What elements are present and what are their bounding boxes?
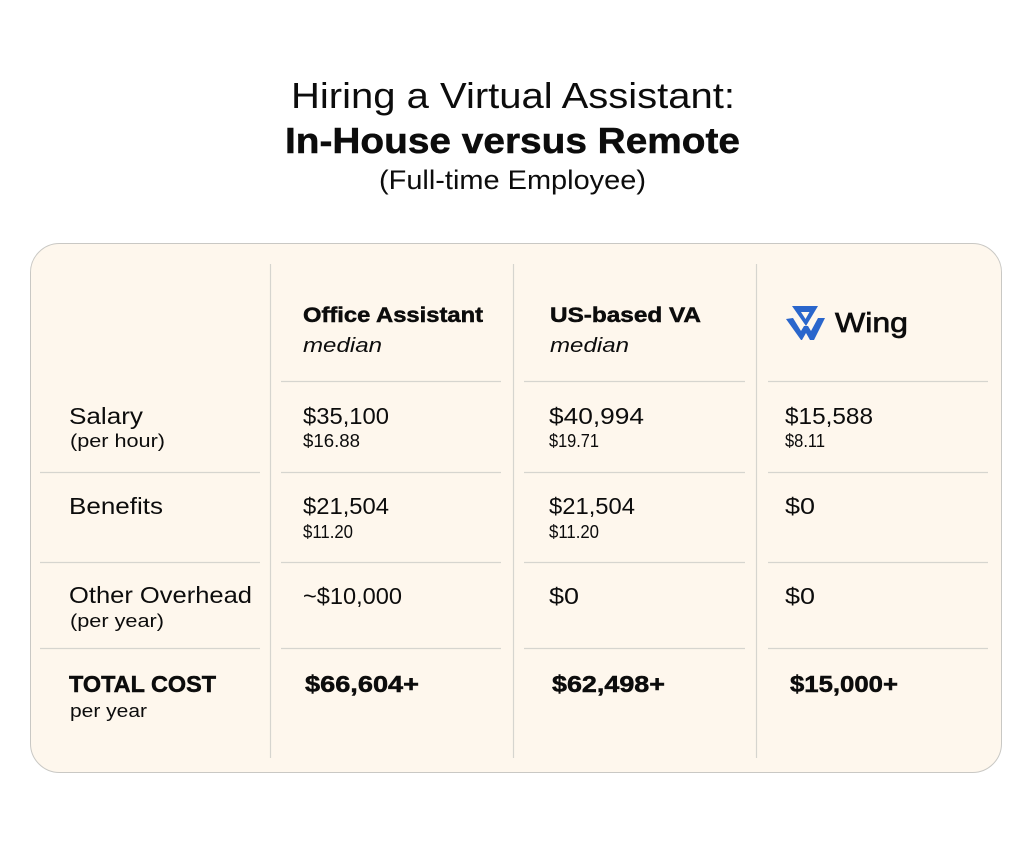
row: Benefits — [69, 493, 815, 542]
row: Salary: $19.71 — [549, 430, 599, 451]
row: Other Overhead: ~$10,000 — [303, 583, 402, 609]
row: Total cost: TOTAL COST — [69, 671, 216, 697]
row: Other Overhead: (per year) — [70, 610, 164, 631]
title: In-House versus Remote — [285, 120, 740, 161]
panel: comparison table — [30, 244, 1002, 772]
icon: Wing logo mark — [786, 306, 825, 340]
column header: US-based VA — [550, 303, 701, 357]
row: Salary: $35,100 — [303, 403, 389, 429]
title: (Full-time Employee) — [379, 165, 646, 195]
row: Benefits: $11.20 — [303, 521, 353, 542]
row: Total cost — [69, 671, 898, 721]
title: Hiring a Virtual Assistant: — [291, 75, 735, 116]
row: Benefits: $21,504 — [303, 493, 389, 519]
column header: US-based VA: median — [550, 334, 629, 357]
row: Benefits: Benefits — [69, 493, 163, 519]
row: Benefits: $0 — [785, 493, 815, 519]
row: Salary: $16.88 — [303, 430, 360, 451]
row: Salary: (per hour) — [70, 430, 165, 451]
column header: Wing logo — [786, 306, 908, 340]
row: Benefits: $11.20 — [549, 521, 599, 542]
row: Benefits: $21,504 — [549, 493, 635, 519]
column header: Office Assistant: Office Assistant — [303, 303, 483, 327]
row: Other Overhead: $0 — [549, 583, 579, 609]
column header: Wing logo: Wing — [835, 307, 908, 338]
column header: Office Assistant — [303, 303, 483, 357]
title — [285, 75, 740, 195]
row: Salary: $15,588 — [785, 403, 873, 429]
column header: Office Assistant: median — [303, 334, 382, 357]
row: Total cost: $66,604+ — [305, 671, 419, 697]
row: Other Overhead — [69, 582, 815, 631]
row: Salary: Salary — [69, 403, 144, 429]
row: Total cost: $62,498+ — [552, 671, 665, 697]
row: Other Overhead: $0 — [785, 583, 815, 609]
row: Salary: $8.11 — [785, 430, 825, 451]
row: Total cost: per year — [70, 700, 147, 721]
row: Total cost: $15,000+ — [790, 671, 898, 697]
row: Other Overhead: Other Overhead — [69, 582, 252, 608]
row: Salary: $40,994 — [549, 403, 644, 429]
row: Salary — [69, 403, 873, 451]
column header: US-based VA: US-based VA — [550, 303, 701, 327]
